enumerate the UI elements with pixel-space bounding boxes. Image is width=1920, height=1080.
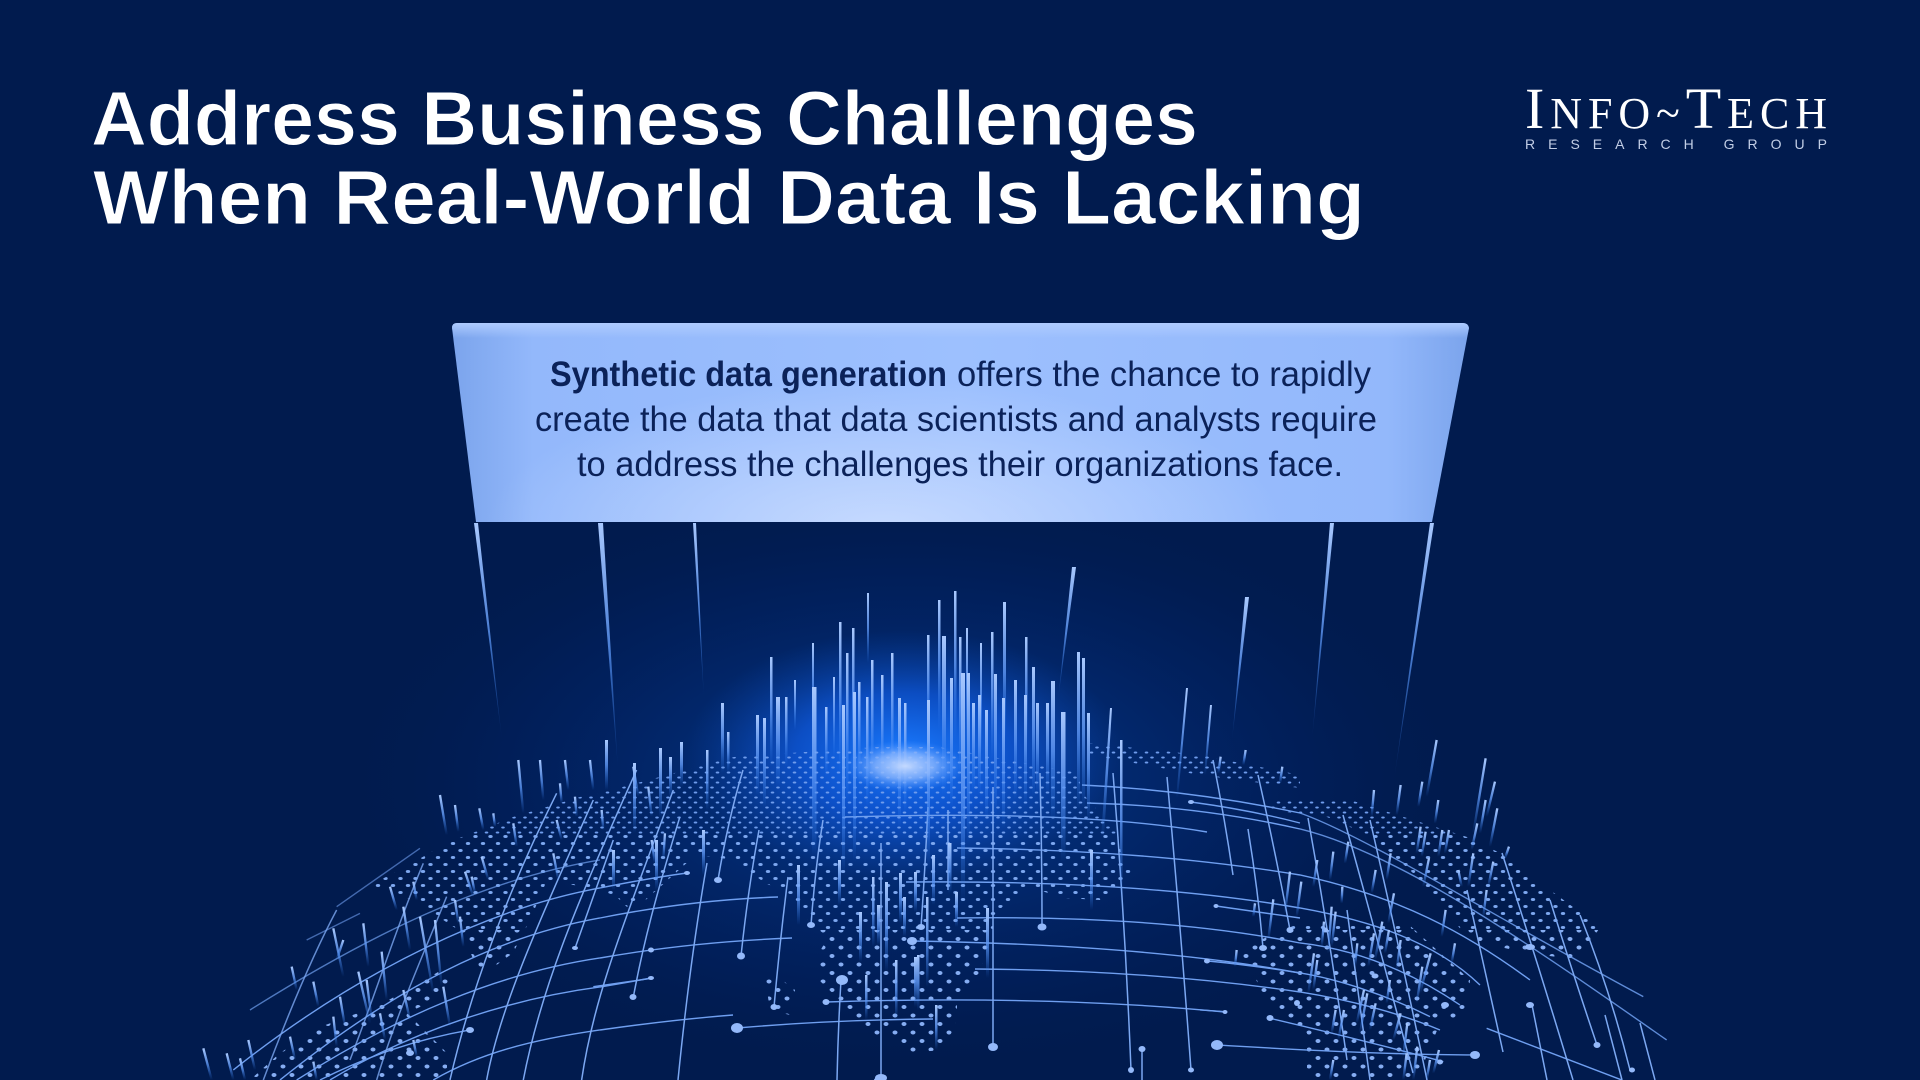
right data spikes: [1218, 740, 1509, 1080]
title: When Real-World Data Is Lacking: [93, 155, 1365, 241]
dotted continents: [254, 743, 1598, 1077]
callout text: Synthetic data generation: [550, 355, 947, 394]
pin heads: [406, 800, 1635, 1080]
left data spikes: [203, 760, 665, 1080]
callout text: offers the chance to rapidly: [957, 355, 1371, 394]
background glow: [325, 480, 1485, 1080]
central data spikes: [605, 591, 1212, 1050]
longitude lines: left hemisphere: [263, 770, 680, 1080]
support beams from panel to globe: [474, 523, 1434, 780]
callout panel: [452, 323, 1469, 522]
globe: [180, 591, 1680, 1080]
longitude lines: centre and right: [678, 760, 1655, 1080]
latitude lines: centre: [600, 785, 1300, 1030]
latitude lines: right hemisphere: [1200, 813, 1667, 1080]
central light core: [845, 740, 965, 792]
logo: Info-Tech Research Group: INFO~TECH: [1525, 76, 1827, 141]
title: Address Business Challenges: [91, 76, 1198, 162]
callout text: create the data that data scientists and analysts require: [535, 400, 1377, 439]
latitude lines: left hemisphere: [233, 848, 652, 1080]
callout text: [535, 355, 1377, 484]
logo: Info-Tech Research Group: RESEARCH GROUP: [1525, 136, 1827, 152]
callout text: to address the challenges their organizations face.: [577, 445, 1343, 484]
title: [91, 76, 1365, 241]
